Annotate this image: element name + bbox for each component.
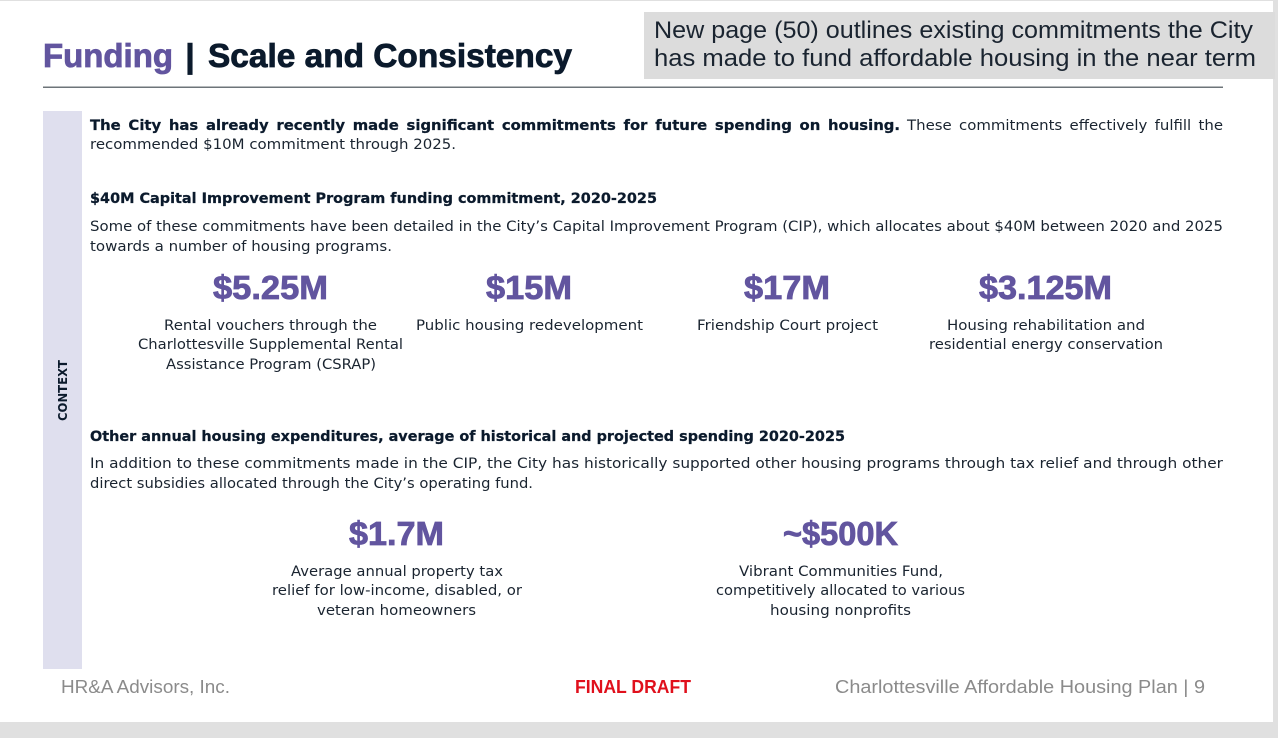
- sidebar: context: CONTEXT: [55, 360, 70, 421]
- stat: property tax relief: veteran homeowners: [317, 603, 476, 619]
- stat: friendship court: Friendship Court project: [697, 318, 878, 334]
- stat: rental vouchers: Assistance Program (CSRAP): [166, 357, 376, 373]
- heading: CIP commitment: $40M Capital Improvement Program funding commitment, 2020-2025: [90, 191, 657, 207]
- text: CIP description: [90, 219, 1223, 255]
- stat: rental vouchers: [138, 269, 403, 373]
- footer: FINAL DRAFT: [575, 677, 691, 697]
- stat: rehabilitation: $3.125M: [979, 269, 1112, 306]
- stat: property tax relief: [272, 515, 522, 619]
- stat: friendship court: $17M: [744, 269, 830, 306]
- footer: Charlottesville Affordable Housing Plan | 9: [835, 677, 1205, 697]
- intro text: recommended $10M commitment through 2025.: [90, 137, 456, 153]
- callout: new page note: [644, 12, 1275, 79]
- text: other expenditures description: direct subsidies allocated through the City’s operating fund.: [90, 476, 533, 492]
- stat: vibrant communities: [716, 515, 965, 619]
- stat: vibrant communities: ~$500K: [783, 515, 898, 552]
- heading: other expenditures: Other annual housing expenditures, average of historical and projected spending 2020-2025: [90, 429, 845, 445]
- footer: [61, 677, 1205, 697]
- stat: property tax relief: Average annual property tax: [291, 564, 503, 580]
- stat: rental vouchers: $5.25M: [213, 269, 328, 306]
- stat: public housing: [416, 269, 643, 334]
- title: Scale and Consistency: [208, 37, 573, 74]
- stat: vibrant communities: competitively allocated to various: [716, 583, 965, 599]
- sidebar: context: [43, 111, 82, 669]
- intro text: These commitments effectively fulfill the: [906, 118, 1223, 134]
- title: Funding: [43, 37, 173, 74]
- title: |: [185, 37, 195, 74]
- text: other expenditures description: [90, 456, 1223, 492]
- stat: property tax relief: relief for low-income, disabled, or: [272, 583, 522, 599]
- stat: public housing: Public housing redevelopment: [416, 318, 643, 334]
- text: other expenditures description: In addition to these commitments made in the CIP, the City has historically supported other housing programs through tax relief and through other: [90, 456, 1223, 472]
- intro text: [90, 118, 1223, 153]
- callout: new page note: has made to fund affordable housing in the near term: [654, 45, 1256, 72]
- stat: friendship court: [697, 269, 878, 334]
- stat: rental vouchers: Rental vouchers through the: [164, 318, 377, 334]
- title: [43, 37, 573, 74]
- callout: new page note: New page (50) outlines existing commitments the City: [654, 17, 1254, 44]
- text: CIP description: Some of these commitments have been detailed in the City’s Capital Improvement Program (CIP), which allocates about $40M between 2020 and 2025: [90, 219, 1223, 235]
- stat: property tax relief: $1.7M: [349, 515, 444, 552]
- intro text: The City has already recently made significant commitments for future spending on housing.: [90, 118, 900, 134]
- stat: vibrant communities: housing nonprofits: [770, 603, 911, 619]
- stat: rehabilitation: residential energy conservation: [929, 337, 1163, 353]
- stat: vibrant communities: Vibrant Communities Fund,: [739, 564, 943, 580]
- footer: HR&A Advisors, Inc.: [61, 677, 230, 697]
- stat: rehabilitation: Housing rehabilitation and: [947, 318, 1145, 334]
- stat: public housing: $15M: [486, 269, 572, 306]
- text: CIP description: towards a number of housing programs.: [90, 239, 392, 255]
- stat: rehabilitation: [929, 269, 1163, 353]
- stat: rental vouchers: Charlottesville Supplemental Rental: [138, 337, 403, 353]
